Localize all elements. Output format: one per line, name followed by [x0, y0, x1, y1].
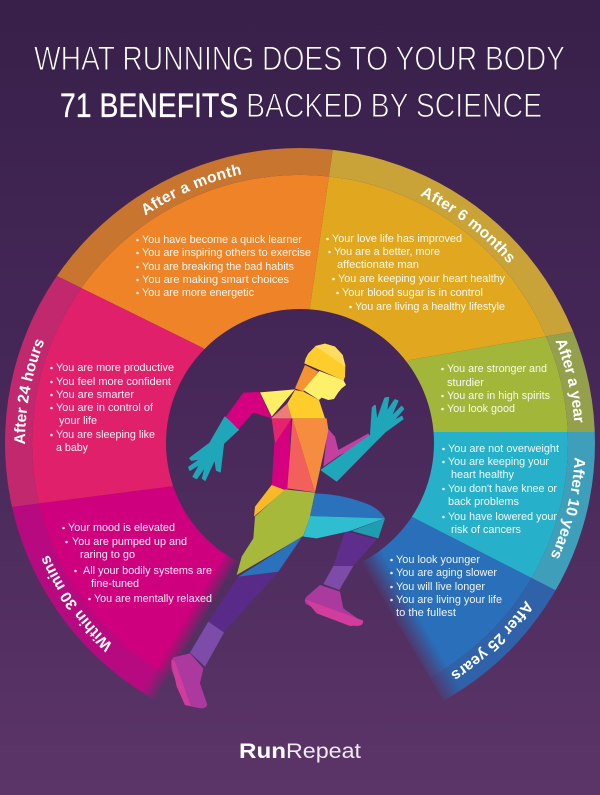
list: after a month: You are inspiring others to exercise — [142, 247, 311, 259]
logo: Run — [239, 740, 286, 763]
back arm — [323, 428, 372, 467]
list: after 6 months: You are living a healthy lifestyle — [355, 301, 505, 313]
list: within 30 mins: fine-tuned — [91, 578, 139, 590]
front lower leg — [333, 531, 377, 566]
label: after 24 hours: After 24 hours — [14, 340, 44, 444]
label: within 30 mins: Within 30 mins — [42, 556, 111, 652]
list: after 24 hours — [50, 362, 174, 454]
list: after 24 hours: You are in control of — [56, 402, 154, 414]
upper arm — [226, 392, 272, 429]
list: within 30 mins: Your mood is elevated — [68, 522, 175, 534]
list: after 6 months — [326, 233, 505, 313]
list: after a year: sturdier — [447, 377, 484, 389]
list: after a year: You are in high spirits — [447, 390, 550, 402]
list: after 25 years: You look younger — [396, 554, 480, 566]
logo — [239, 740, 361, 763]
front shoe — [305, 585, 363, 626]
list: after 10 years: risk of cancers — [451, 524, 521, 536]
hips and shorts — [237, 485, 315, 577]
list: after 24 hours: You are smarter — [56, 389, 134, 401]
logo: Repeat — [286, 740, 361, 763]
back leg — [208, 572, 278, 633]
list: after a month: You are more energetic — [142, 287, 254, 299]
list: after 10 years: heart healthy — [451, 469, 514, 481]
title: 71 BENEFITS BACKED BY SCIENCE — [60, 87, 542, 125]
list: after 10 years — [442, 443, 559, 536]
list: after 6 months: affectionate man — [337, 259, 419, 271]
list: after a month: You are making smart choices — [142, 274, 289, 286]
list: after a year: You are stronger and — [447, 363, 547, 375]
panel: within 30 mins — [12, 486, 237, 699]
list: after 25 years: You will live longer — [396, 581, 485, 593]
list: within 30 mins: raring to go — [80, 549, 135, 561]
panel: after a year — [406, 332, 595, 432]
list: after 6 months: Your love life has improved — [332, 233, 462, 245]
panel: after 25 years — [363, 517, 556, 700]
list: after 10 years: You have lowered your — [448, 511, 557, 523]
rear hand and forearm — [189, 417, 238, 480]
title — [34, 40, 565, 125]
back shoe — [171, 653, 207, 708]
front thigh — [303, 493, 385, 538]
list: after 24 hours: your life — [59, 415, 97, 427]
list: after a month: You are breaking the bad habits — [142, 261, 294, 273]
panel: after 24 hours — [5, 276, 204, 507]
list: after 6 months: You are keeping your heart healthy — [338, 273, 505, 285]
list: after 6 months: You are a better, more — [334, 246, 440, 258]
panel: after a month — [57, 148, 333, 350]
label: after 25 years: After 25 years — [452, 600, 532, 679]
list: after 24 hours: You feel more confident — [56, 376, 171, 388]
torso — [260, 389, 328, 492]
runner figure — [171, 344, 403, 708]
list: after 24 hours: You are more productive — [56, 362, 174, 374]
list: after 25 years — [390, 554, 502, 619]
label: after 6 months: After 6 months — [420, 188, 514, 262]
list: after 25 years: You are aging slower — [396, 567, 497, 579]
list: after 10 years: You are not overweight — [448, 443, 559, 455]
list: after 25 years: to the fullest — [396, 607, 456, 619]
list: after a year — [441, 363, 550, 415]
list: after a month — [136, 234, 311, 299]
list: after a month: You have become a quick learner — [142, 234, 302, 246]
front hand and forearm — [322, 398, 403, 481]
list: within 30 mins: You are pumped up and — [72, 536, 187, 548]
head — [295, 344, 346, 400]
panel: after 6 months — [310, 150, 573, 362]
label: after a month: After a month — [143, 164, 242, 216]
panel: after 10 years — [412, 432, 595, 590]
list: after 10 years: back problems — [448, 496, 519, 508]
list: after 24 hours: You are sleeping like — [56, 429, 155, 441]
list: within 30 mins — [62, 522, 212, 605]
list: after 25 years: You are living your life — [396, 594, 502, 606]
list: within 30 mins: You are mentally relaxed — [94, 593, 212, 605]
list: after 10 years: You are keeping your — [448, 456, 549, 468]
list: after 10 years: You don't have knee or — [448, 483, 557, 495]
list: after 24 hours: a baby — [56, 442, 88, 454]
label: after a year: After a year — [555, 340, 582, 422]
label: after 10 years: After 10 years — [552, 458, 586, 558]
list: within 30 mins: All your bodily systems are — [83, 565, 212, 577]
list: after a year: You look good — [447, 403, 515, 415]
list: after 6 months: Your blood sugar is in control — [342, 287, 483, 299]
